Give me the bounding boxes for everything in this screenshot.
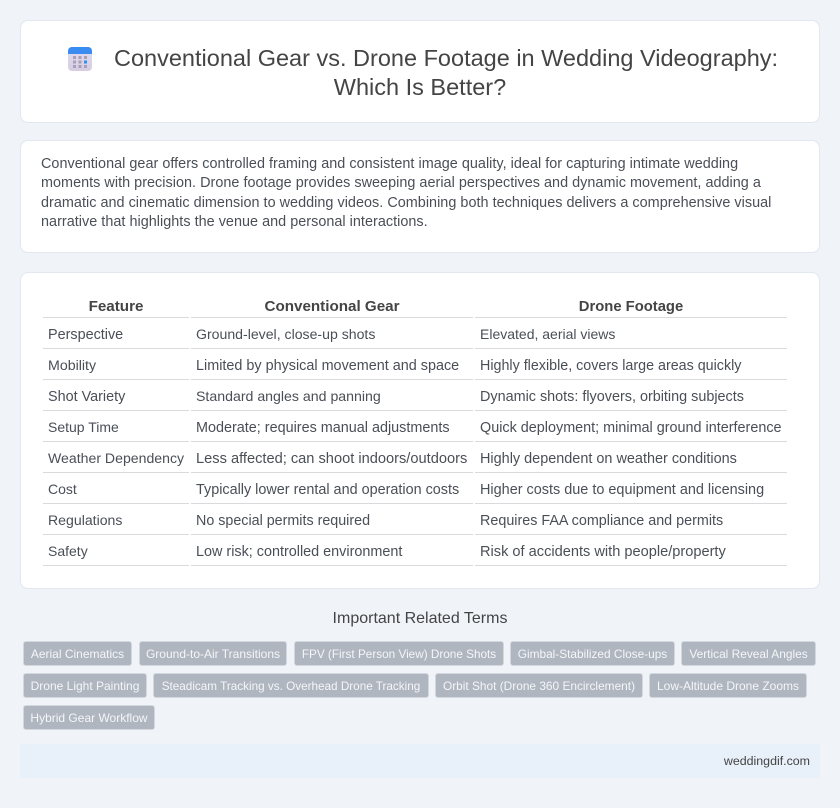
intro text: moments with precision. Drone footage provides sweeping aerial perspectives and dynamic movement, adding a	[41, 175, 761, 191]
row: Mobility	[48, 358, 742, 374]
intro text	[41, 156, 771, 230]
tag: Steadicam Tracking vs. Overhead Drone Tracking	[162, 680, 420, 693]
panel: title header	[20, 20, 820, 123]
tag: FPV (First Person View) Drone Shots	[302, 648, 496, 661]
footer site name: weddingdif.com	[724, 754, 810, 768]
row: Mobility: Limited by physical movement and space	[196, 358, 459, 374]
row: Weather Dependency: Weather Dependency	[48, 450, 184, 466]
heading: Important Related Terms: Important Related Terms	[333, 610, 507, 627]
tag	[23, 673, 147, 698]
title: Which Is Better?	[334, 74, 506, 100]
tag	[435, 673, 643, 698]
tag: Low-Altitude Drone Zooms	[657, 679, 799, 693]
row: Safety: Risk of accidents with people/property	[480, 544, 726, 560]
tag: Ground-to-Air Transitions	[146, 647, 280, 661]
column header: Feature: Feature	[89, 298, 143, 315]
footer bar	[20, 744, 820, 778]
tag	[139, 641, 287, 666]
tag	[649, 673, 807, 698]
column header: Conventional Gear: Conventional Gear	[264, 298, 400, 315]
tag	[23, 641, 132, 666]
related terms tags	[23, 641, 816, 730]
title: Conventional Gear vs. Drone Footage in Wedding Videography:	[114, 45, 778, 71]
intro text: Conventional gear offers controlled framing and consistent image quality, ideal for capturing intimate wedding	[41, 156, 738, 172]
row: Cost: Typically lower rental and operation costs	[196, 482, 459, 498]
tag: Orbit Shot (Drone 360 Encirclement)	[443, 679, 635, 693]
row: Perspective: Perspective	[48, 327, 123, 343]
tag: Hybrid Gear Workflow	[30, 711, 148, 725]
row: Perspective: Ground-level, close-up shots	[196, 326, 375, 342]
row: Cost: Cost	[48, 481, 77, 497]
comparison table	[43, 298, 787, 566]
row: Cost: Higher costs due to equipment and licensing	[480, 482, 764, 498]
row: Regulations: No special permits required	[196, 513, 370, 529]
tag	[294, 641, 504, 666]
row: Weather Dependency: Less affected; can shoot indoors/outdoors	[196, 451, 467, 467]
row: Setup Time: Moderate; requires manual adjustments	[196, 420, 450, 436]
panel: comparison table	[20, 272, 820, 589]
row: Shot Variety: Dynamic shots: flyovers, orbiting subjects	[480, 389, 744, 405]
row: Safety: Safety	[48, 543, 88, 559]
row: Weather Dependency: Highly dependent on weather conditions	[480, 451, 737, 467]
row: Regulations: Requires FAA compliance and permits	[480, 513, 723, 529]
row: Setup Time: Quick deployment; minimal ground interference	[480, 420, 782, 436]
row: Perspective	[48, 326, 615, 343]
row: Safety: Low risk; controlled environment	[196, 544, 402, 560]
title	[114, 45, 778, 100]
row: Regulations	[48, 512, 723, 529]
tag: Drone Light Painting	[31, 679, 139, 693]
intro text: narrative that highlights the venue and personal interactions.	[41, 214, 428, 230]
row: Regulations: Regulations	[48, 512, 122, 528]
row: Cost	[48, 481, 764, 498]
row: Shot Variety: Shot Variety	[48, 389, 125, 405]
column header: Drone Footage: Drone Footage	[579, 299, 683, 315]
tag	[23, 705, 155, 730]
row: Perspective: Elevated, aerial views	[480, 326, 615, 342]
row: Mobility: Mobility	[48, 358, 96, 374]
panel: introduction	[20, 140, 820, 253]
tag	[510, 641, 675, 666]
tag: Aerial Cinematics	[31, 647, 124, 661]
row: Safety	[48, 543, 726, 560]
tag: Gimbal-Stabilized Close-ups	[518, 647, 667, 661]
tag	[153, 673, 429, 698]
icon: calendar	[68, 47, 92, 71]
row: Weather Dependency	[48, 450, 737, 467]
row: Mobility: Highly flexible, covers large areas quickly	[480, 358, 741, 374]
row: Setup Time	[48, 419, 782, 436]
intro text: dramatic and cinematic dimension to wedding videos. Combining both techniques delivers a comprehensive visual	[41, 195, 771, 211]
tag	[681, 641, 816, 666]
row: Shot Variety: Standard angles and panning	[196, 388, 381, 404]
tag: Vertical Reveal Angles	[689, 647, 808, 661]
row: Setup Time: Setup Time	[48, 419, 119, 435]
row: Shot Variety	[48, 388, 744, 405]
